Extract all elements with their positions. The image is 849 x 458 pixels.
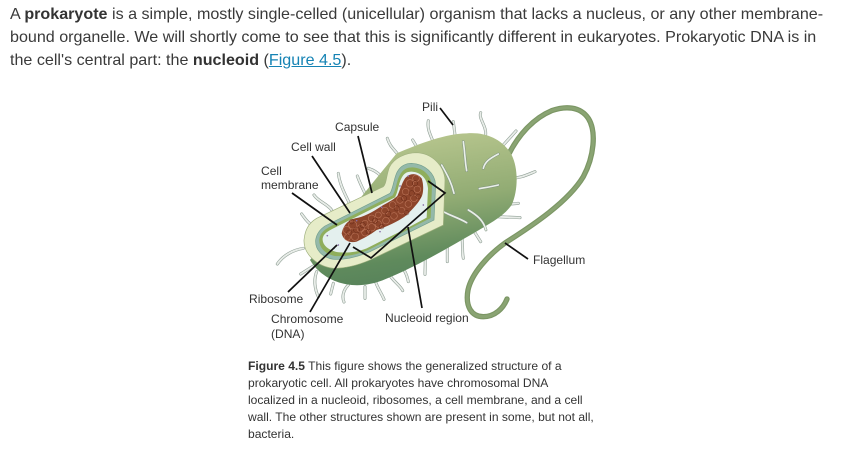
label: Chromosome (DNA): Chromosome (271, 312, 343, 326)
cell body exterior (310, 133, 517, 285)
figure caption (248, 359, 594, 441)
capsule cross-section (304, 153, 445, 268)
label: Nucleoid region: Nucleoid region (385, 311, 469, 325)
label: Pili: Pili (422, 100, 438, 114)
figure caption: wall. The other structures shown are present in some, but not all, (248, 410, 594, 424)
chromosome DNA (342, 174, 423, 242)
label: Flagellum: Flagellum (533, 253, 585, 267)
ribosomes (326, 175, 424, 249)
label: Ribosome: Ribosome (249, 292, 304, 306)
cell illustration (277, 108, 593, 317)
intro paragraph: A prokaryote is a simple, mostly single-celled (unicellular) organism that lacks a nucleus, or any other membrane- (10, 5, 823, 23)
cell wall ring (316, 163, 436, 259)
label: Chromosome (DNA): (DNA) (271, 327, 304, 341)
pili on body surface (435, 142, 498, 230)
intro paragraph: the cell's central part: the nucleoid (Figure 4.5). (10, 51, 351, 69)
leader lines (288, 108, 528, 312)
label: Cell membrane: membrane (261, 178, 319, 192)
figure caption: localized in a nucleoid, ribosomes, a cell membrane, and a cell (248, 393, 583, 407)
intro paragraph (10, 5, 823, 69)
flagellum (467, 108, 593, 317)
figure caption: bacteria. (248, 427, 294, 441)
label: Cell wall: Cell wall (291, 140, 336, 154)
figure caption: Figure 4.5 This figure shows the generalized structure of a (248, 359, 562, 373)
pili (277, 113, 535, 302)
label: Cell membrane: Cell (261, 164, 282, 178)
cell membrane ring (319, 167, 432, 256)
intro paragraph: bound organelle. We will shortly come to see that this is significantly different in eukaryotes. Prokaryotic DNA is in (10, 28, 816, 46)
figure caption: prokaryotic cell. All prokaryotes have chromosomal DNA (248, 376, 548, 390)
cytoplasm (323, 172, 428, 253)
label: Capsule: Capsule (335, 120, 379, 134)
